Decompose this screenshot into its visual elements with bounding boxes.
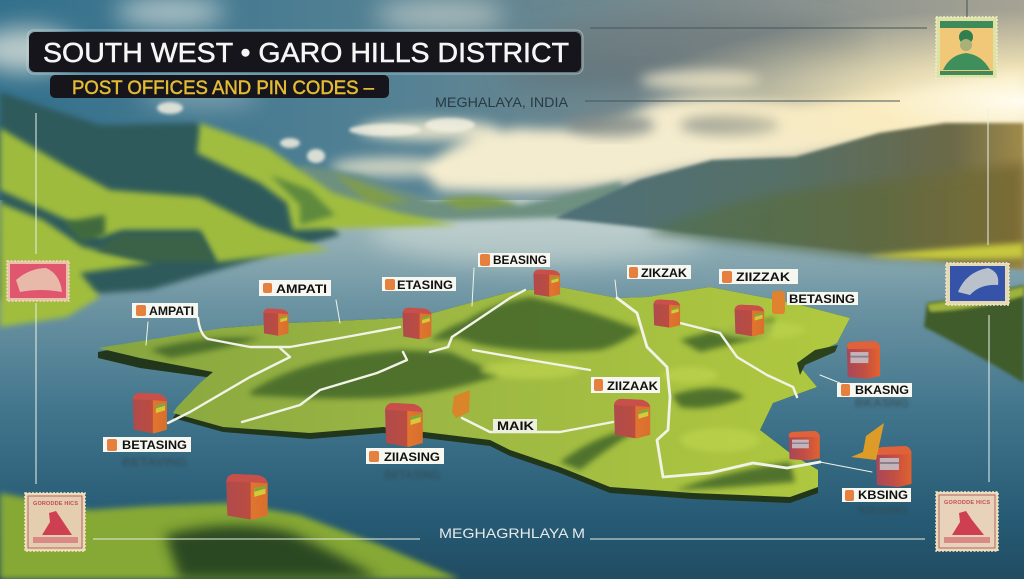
label: Ziizzak [719, 269, 798, 284]
label: Ziiasing: ZIIASING [384, 450, 440, 464]
label: Ziizaak [591, 377, 660, 393]
post box: Kbsing [876, 446, 911, 487]
post box: Ziiasing [385, 403, 423, 447]
label: Maik: MAIK [497, 421, 535, 433]
map: coastline dark notches [797, 345, 838, 375]
background: far hills centre [300, 165, 640, 222]
label: Kbsing [842, 488, 911, 502]
subtitle banner: POST OFFICES AND PIN CODES – [72, 78, 374, 99]
post box: Etasing [403, 308, 431, 339]
map: white roads [146, 268, 872, 477]
stamp: top right figure [936, 17, 997, 78]
label: Maik [493, 419, 537, 433]
post box: bottom hill [226, 474, 268, 520]
stamp: left pink [7, 261, 69, 301]
label: Ampati right [259, 280, 331, 296]
stamp: bottom left: GORODDE HICS [33, 501, 78, 507]
label: Kbsing: KBSING [858, 490, 908, 502]
label: Ziizzak: ZIIZZAK [736, 270, 790, 284]
label: Ampati left: AMPATI [149, 306, 194, 318]
background: water [0, 200, 1024, 579]
title banner [27, 30, 583, 74]
post box: Ampati 1 [263, 309, 289, 336]
map: district land [98, 287, 850, 503]
background: green hills left [0, 92, 457, 327]
label: Ampati left [132, 303, 198, 318]
background: right mountains [555, 123, 1024, 270]
label reflections: BETASING [384, 470, 440, 482]
label: Zikzak: ZIKZAK [641, 268, 688, 280]
title banner: SOUTH WEST • GARO HILLS DISTRICT [43, 37, 569, 68]
label: Ampati right: AMPATI [276, 284, 327, 296]
map: bright terrain highlights [480, 321, 805, 452]
post box: coast [789, 431, 820, 461]
post box: Zikzak [653, 300, 680, 328]
sign: small orange marker [452, 390, 470, 418]
post box: Ziizzak [735, 305, 764, 336]
label: Zikzak [627, 265, 691, 280]
background: green hill bottom left [0, 493, 460, 579]
label: Bkasng [837, 383, 912, 397]
label: Betasing lower left [103, 437, 191, 452]
label: Bkasng: BKASNG [855, 385, 909, 397]
stamp: bottom left [25, 493, 85, 551]
label: Beasing: BEASING [493, 255, 547, 267]
post box: Ziizaak [614, 399, 650, 438]
label: Etasing [382, 277, 456, 292]
post box: Beasing [533, 270, 560, 297]
label: Betasing upper right: BETASING [789, 294, 855, 306]
label: Ziiasing [366, 448, 444, 464]
background: green hill right [924, 285, 1024, 383]
sign: orange marker near Betasing [772, 291, 785, 314]
location text bottom: MEGHAGRHLAYA M [439, 525, 585, 541]
label reflections [122, 398, 909, 517]
map: terrain shadows [150, 297, 795, 490]
label: Ziizaak: ZIIZAAK [607, 379, 658, 393]
label: Beasing [478, 253, 550, 267]
label: Betasing lower left: BETASING [122, 438, 187, 452]
label reflections: KBSING [858, 505, 908, 517]
label reflections: BKASNG [855, 398, 909, 410]
label: Etasing: ETASING [397, 280, 453, 292]
location text top: MEGHALAYA, INDIA [435, 95, 568, 110]
post box: Bkasng [847, 341, 880, 379]
stamp: right blue [946, 263, 1009, 305]
sign: yellow marker [851, 423, 884, 460]
label reflections: BETAVING [122, 457, 187, 469]
post box: lower left Betasing [133, 393, 167, 433]
stamp: bottom right: GORODDE HICS [944, 500, 990, 506]
stamp: bottom right [936, 492, 998, 551]
background: sky and clouds [0, 0, 1024, 250]
